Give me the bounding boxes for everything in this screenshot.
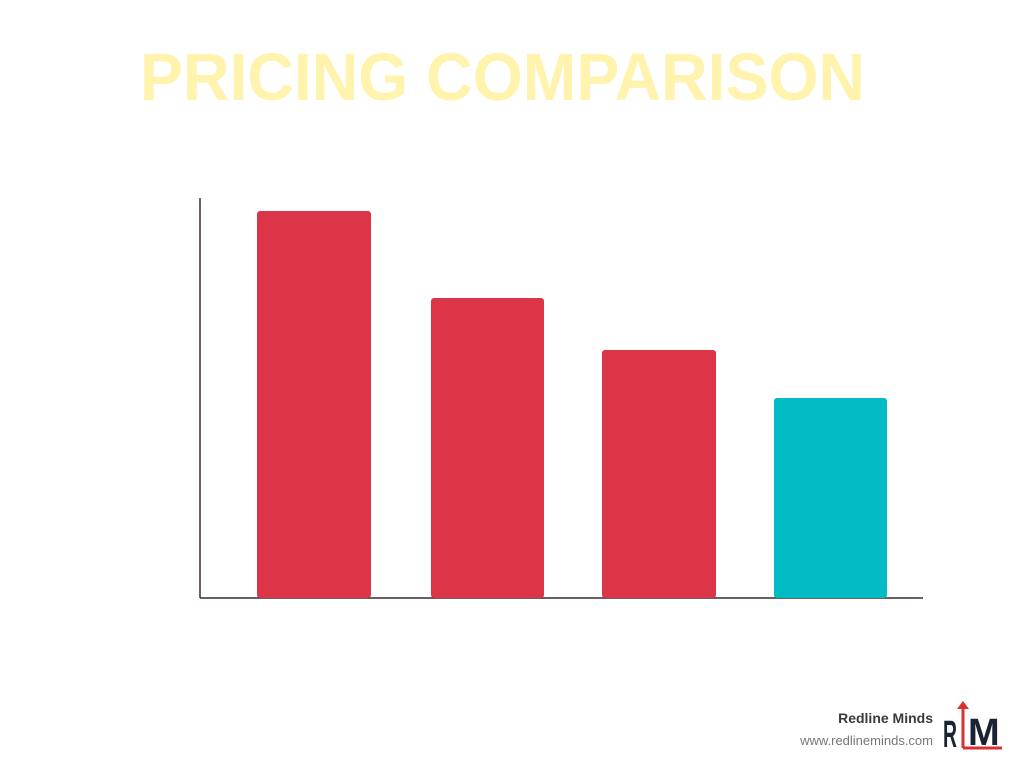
bar 3	[602, 350, 716, 598]
brand url: www.redlineminds.com	[799, 733, 933, 748]
bar chart	[200, 198, 923, 598]
brand name: Redline Minds	[838, 710, 933, 726]
logo: R	[943, 714, 957, 756]
bar 2	[431, 298, 544, 598]
logo: M	[968, 712, 1000, 754]
logo	[943, 701, 1002, 756]
title: PRICING COMPARISON	[140, 40, 865, 115]
bar 4 highlighted	[774, 398, 887, 598]
bar 1	[257, 211, 371, 598]
